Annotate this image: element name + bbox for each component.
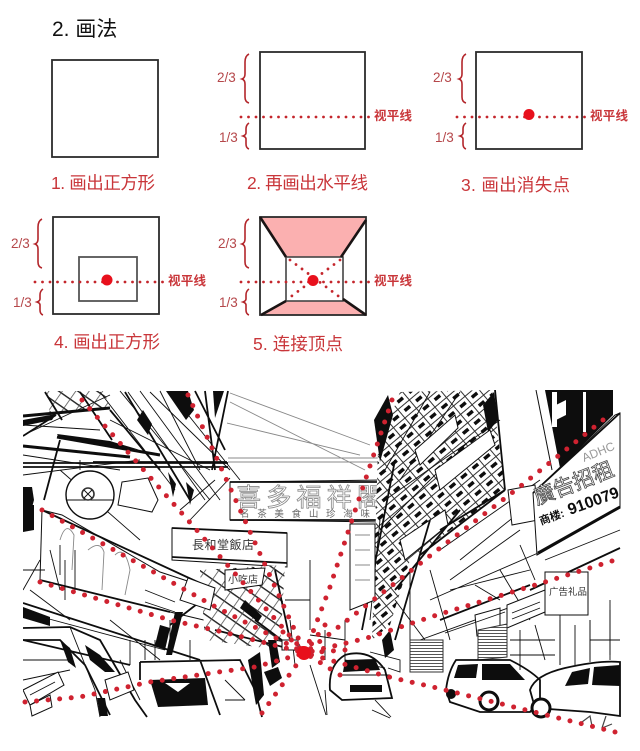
- panel: step 1 square: [51, 60, 158, 193]
- label: 2/3: 2/3: [433, 70, 452, 85]
- signature: [582, 716, 612, 728]
- caption: step 4: 4. 画出正方形: [54, 332, 160, 352]
- panel: step 4 inner square: [11, 217, 206, 352]
- mid-left storefront details: [23, 590, 240, 665]
- large ad billboard: 910079: [566, 484, 622, 519]
- centre shops: [180, 565, 295, 650]
- vanishing point: [524, 109, 534, 120]
- center-right lower building: [382, 480, 540, 660]
- label: horizon: 视平线: [374, 108, 412, 123]
- box sign: [118, 478, 158, 512]
- centre-left foreground car: [140, 652, 282, 717]
- bracket: two thirds: [242, 54, 249, 103]
- label: 2/3: 2/3: [218, 236, 237, 251]
- dotted horizon line: [35, 281, 168, 283]
- left foreground car: [23, 627, 147, 717]
- sign: red and white shop board: [172, 528, 287, 567]
- caption: step 2: 2. 再画出水平线: [247, 173, 368, 193]
- central overhead banner: 名茶美食山珍海味: [240, 508, 370, 520]
- street scene illustration: [23, 390, 622, 732]
- vanishing point: [102, 274, 112, 286]
- dotted horizon line: [457, 116, 591, 118]
- bracket: one third: [37, 289, 43, 315]
- bracket: one third: [460, 123, 466, 149]
- rolling shutters: [410, 640, 443, 672]
- top pink trapezoid: [260, 217, 366, 257]
- dotted diagonals: [289, 260, 341, 298]
- vanishing point: [308, 275, 318, 286]
- right tall buildings: [350, 390, 505, 640]
- label: 1/3: 1/3: [435, 130, 454, 145]
- bracket: two thirds: [242, 219, 249, 268]
- central overhead banner: [230, 480, 388, 522]
- large ad billboard: 商楼:: [537, 506, 566, 528]
- upper right dark building: [536, 390, 613, 470]
- top centre dark building: [120, 391, 230, 520]
- panel: step 2 horizon line: [217, 52, 412, 193]
- sign: red and white shop board: 長和堂飯店: [192, 537, 254, 552]
- label: 1/3: 1/3: [219, 295, 238, 310]
- top left awning and beams: [23, 391, 240, 540]
- label: 1/3: 1/3: [219, 130, 238, 145]
- slanted shop sign: [507, 590, 545, 628]
- inner square: [79, 257, 137, 301]
- centre shops: 小吃店: [228, 573, 258, 586]
- label: 1/3: 1/3: [13, 295, 32, 310]
- label: horizon: 视平线: [590, 108, 628, 123]
- hanging shop sign: [545, 572, 588, 615]
- long diagonal shop sign: [23, 505, 215, 622]
- panel: step 3 vanishing point: [433, 52, 628, 195]
- street markings: [310, 665, 391, 717]
- centre vanishing building cluster: [268, 560, 345, 668]
- large ad billboard: [531, 413, 622, 555]
- storefront interior: [510, 610, 620, 670]
- red perspective dots: [25, 395, 615, 732]
- caption: step 1: 1. 画出正方形: [51, 173, 155, 193]
- round hanging sign: [66, 460, 114, 519]
- inner square: [286, 257, 343, 301]
- label: horizon: 视平线: [168, 273, 206, 288]
- vanishing point marker: [297, 646, 311, 660]
- dotted horizon line: [241, 281, 374, 283]
- dotted horizon line: [241, 116, 375, 118]
- bracket: one third: [243, 289, 249, 315]
- large ad billboard: ADHC: [580, 439, 617, 465]
- lower right shops: [410, 530, 620, 672]
- slanted shop sign: [475, 608, 500, 636]
- bracket: one third: [243, 123, 249, 149]
- outer square: [260, 217, 366, 315]
- title: 2. 画法: [52, 18, 117, 41]
- panel: step 5 connect vertices: [218, 217, 412, 354]
- right car: [530, 662, 620, 716]
- caption: step 5: 5. 连接顶点: [253, 334, 343, 354]
- bracket: two thirds: [35, 219, 42, 268]
- street line art: [23, 390, 622, 728]
- white cars at right: [446, 660, 620, 717]
- bracket: two thirds: [459, 54, 466, 103]
- taxi car: [325, 652, 400, 718]
- caption: step 3: 3. 画出消失点: [461, 175, 570, 195]
- central overhead banner: 喜多福祥閣: [236, 484, 382, 512]
- bottom pink trapezoid: [260, 301, 366, 315]
- overhead wires: [227, 393, 388, 470]
- lower right shops: 广告礼品: [549, 586, 587, 598]
- large ad billboard: 廣告招租: [531, 458, 617, 510]
- label: horizon: 视平线: [374, 273, 412, 288]
- label: 2/3: 2/3: [217, 70, 236, 85]
- label: 2/3: 2/3: [11, 236, 30, 251]
- thick connecting lines: [260, 217, 366, 315]
